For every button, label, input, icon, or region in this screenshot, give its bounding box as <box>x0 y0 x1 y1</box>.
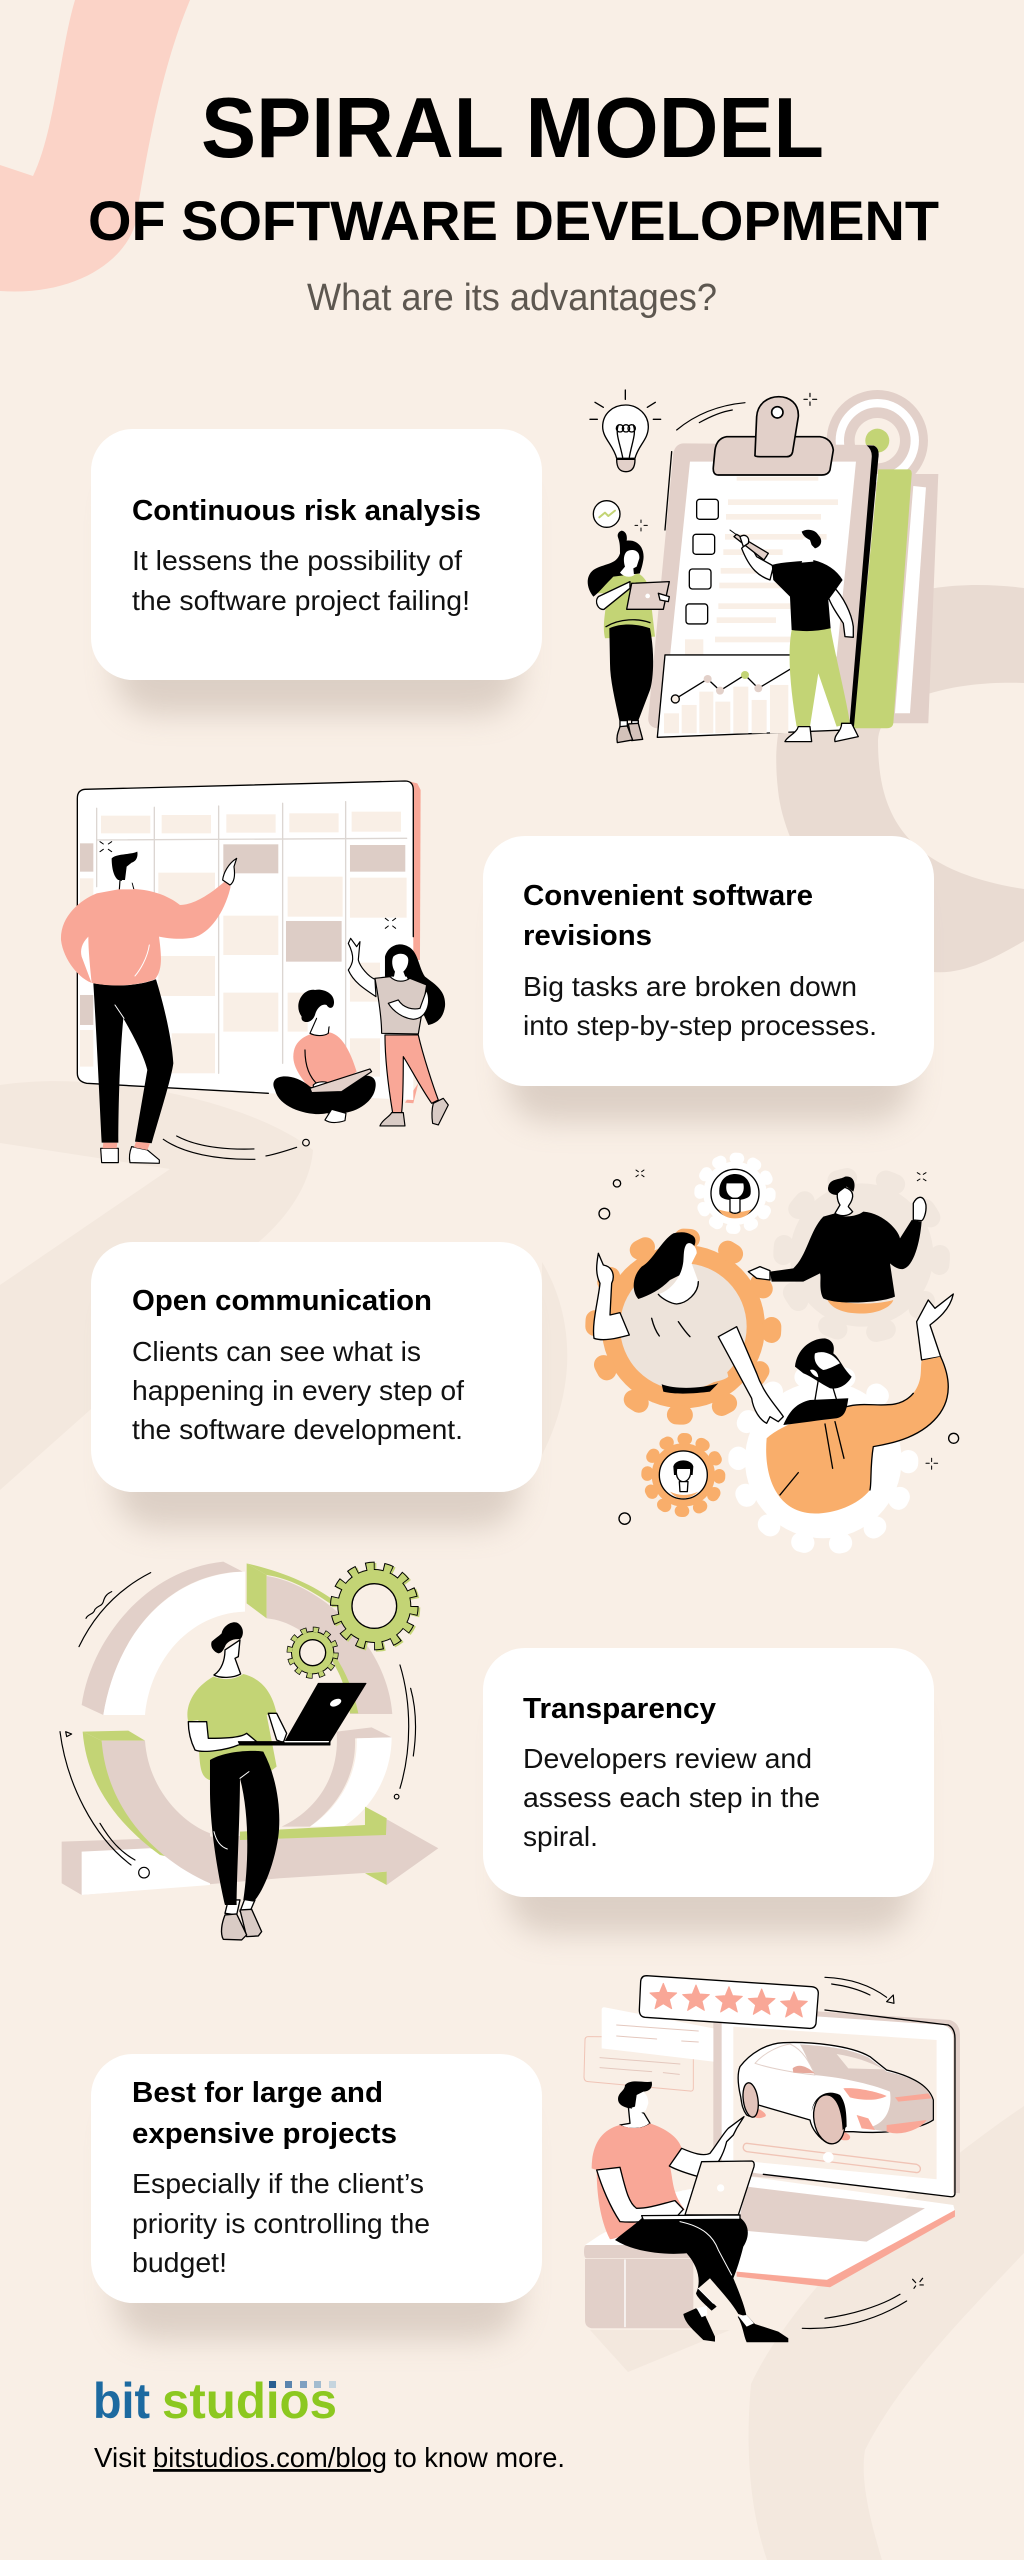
figure: bearded man <box>766 1294 953 1514</box>
panel: card 3: Clients can see what is <box>132 1336 421 1367</box>
panel: card 4: spiral. <box>523 1821 598 1852</box>
title: OF SOFTWARE DEVELOPMENT <box>88 189 939 252</box>
panel: card 3 <box>91 1242 542 1528</box>
illustration: kanban board with three people <box>61 781 448 1163</box>
figure: standing woman <box>348 938 448 1126</box>
panel: card 2: Big tasks are broken down <box>523 971 857 1002</box>
figure: man writing on clipboard <box>730 530 858 742</box>
panel: card 5: Especially if the client’s <box>132 2168 424 2199</box>
logo: bit studios: bit <box>93 2373 150 2429</box>
panel: card 2: into step-by-step processes. <box>523 1010 877 1041</box>
panel: card 2: revisions <box>523 920 652 952</box>
figure: seated man with laptop <box>592 2081 788 2342</box>
footer text: bitstudios.com/blog <box>153 2442 387 2473</box>
panel: card 3: the software development. <box>132 1414 463 1445</box>
figure: woman with tablet <box>588 531 669 743</box>
panel: card 3: Open communication <box>132 1285 432 1317</box>
background swoosh: bottom right beige <box>590 2106 1024 2560</box>
footer text <box>94 2442 565 2473</box>
figure: man in black <box>748 1176 926 1314</box>
figure: man in pink sweater <box>61 852 237 1163</box>
illustration: spiral arrows with person and laptop <box>60 1562 438 1940</box>
chart panel <box>657 655 847 737</box>
panel: card 2 <box>483 836 934 1122</box>
panel: card 5: budget! <box>132 2247 227 2278</box>
footer text: Visit <box>94 2442 146 2473</box>
rating box <box>639 1976 818 2028</box>
panel: card 5: Best for large and <box>132 2077 383 2109</box>
panel: card 3: happening in every step of <box>132 1375 464 1406</box>
footer text: to know more. <box>394 2442 565 2473</box>
illustration: gears and communicating people <box>594 1158 959 1545</box>
panel: card 4: Developers review and <box>523 1743 812 1774</box>
icon: avatars <box>659 1169 759 1499</box>
panel: card 1 <box>91 429 542 715</box>
panel: card 2: Convenient software <box>523 880 813 912</box>
panel: card 5: expensive projects <box>132 2118 397 2150</box>
logo: bit studios: studios <box>162 2373 337 2429</box>
icon: light bulb <box>590 390 661 472</box>
panel: card 4: assess each step in the <box>523 1782 820 1813</box>
illustration: person reviewing car on laptop <box>584 1976 960 2342</box>
icon: small gear <box>289 1629 336 1676</box>
note cards <box>584 2007 713 2091</box>
figure: person with laptop <box>187 1622 366 1940</box>
panel: card 5 <box>91 2054 542 2340</box>
car <box>738 2042 933 2146</box>
panel: card 1: Continuous risk analysis <box>132 495 481 527</box>
title <box>88 81 939 252</box>
background swoosh: left beige <box>0 1081 567 1490</box>
figure: seated person <box>273 990 376 1123</box>
background swoosh: right taupe <box>776 585 1024 972</box>
figure: woman in gear <box>594 1232 783 1423</box>
illustration: clipboard with two people <box>588 390 938 743</box>
background swoosh: top left pink <box>0 0 190 292</box>
panel: card 4: Transparency <box>523 1693 716 1725</box>
subtitle: What are its advantages? <box>307 277 717 319</box>
icon: large gear <box>334 1566 416 1647</box>
panel: card 4 <box>483 1648 934 1934</box>
title: SPIRAL MODEL <box>201 81 824 176</box>
panel: card 1: It lessens the possibility of <box>132 545 462 576</box>
panel: card 1: the software project failing! <box>132 585 470 616</box>
panel: card 5: priority is controlling the <box>132 2208 430 2239</box>
